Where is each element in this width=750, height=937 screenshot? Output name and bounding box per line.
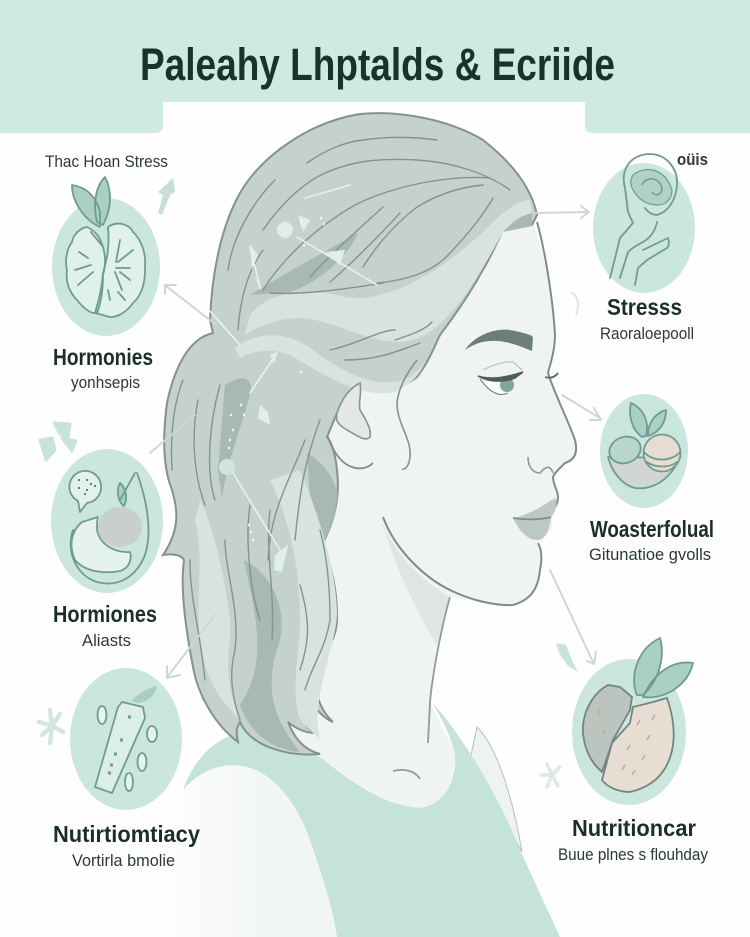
hair highlight arrows and dots [209,185,377,572]
left food [606,432,644,468]
sublabel: hormonies: yonhsepis [71,373,140,392]
front half [602,698,674,792]
neck line [393,597,450,779]
hair base [163,113,537,754]
decorative swirl [571,292,578,315]
panel: top right head icon [593,154,695,293]
label: stress: Stresss [607,294,682,320]
panel: top left brain icon [52,177,160,336]
sublabel: nutirtiomtiacy: Vortirla bmolie [72,851,175,870]
eye [478,362,558,395]
decorative flower right [541,764,560,787]
panel: middle left fruit icon [51,449,163,593]
nose [528,457,553,473]
face and neck skin [200,215,576,808]
eyebrow [465,330,533,351]
left arm [165,765,337,937]
device tip [131,686,157,703]
hair light bands [195,200,532,740]
hair strands [172,137,510,720]
label: top left note: Thac Hoan Stress [45,152,168,171]
lock of hair by face [397,360,417,469]
speech bubble [69,471,101,512]
arrows [150,206,601,678]
right shoulder [470,727,522,852]
label: woasterfolual: Woasterfolual [590,516,714,542]
head outline [610,154,677,285]
sublabel: hormiones: Aliasts [82,631,131,650]
label: nutirtiomtiacy: Nutirtiomtiacy [53,821,200,847]
stem and leaf [118,473,135,506]
seeds [598,710,655,775]
bowl [608,457,680,488]
label: nutritioncar: Nutritioncar [572,815,696,841]
label: hormiones: Hormiones [53,601,157,627]
device [95,702,145,793]
leaves [630,403,666,437]
decorative leaf right [556,643,578,672]
title: Paleahy Lhptalds & Ecriide [140,39,615,90]
brain swirl [631,170,672,205]
face profile line [383,222,576,605]
panel: bottom left device icon [70,668,182,810]
sublabel: stress: Raoraloepooll [600,324,694,343]
header band [0,0,750,133]
tank top [183,702,560,937]
sublabel: woasterfolual: Gitunatioe gvolls [589,545,711,564]
brain [66,224,145,317]
neck shadow [380,515,450,645]
central figure: woman in profile [163,113,576,937]
label: top right note: oüis [677,150,708,169]
bowl ring [71,473,149,584]
back half [583,685,632,772]
melon [71,517,131,572]
panel: middle right food icon [600,394,688,508]
macaron [644,434,680,472]
fruit [98,507,142,547]
decorative flower left [39,710,63,743]
jaw line below ear [328,437,373,468]
droplets [98,706,157,791]
label: hormonies: Hormonies [53,344,153,370]
panel: bottom right fruit icon [572,638,693,805]
decorative clover left [40,423,76,460]
lips [513,498,556,540]
leaves [634,638,693,697]
ear [336,383,370,439]
sublabel: nutritioncar: Buue plnes s flouhday [558,845,708,864]
small decorative arrow top left [158,178,175,215]
hair shadows [218,212,532,752]
leaves [72,177,110,227]
